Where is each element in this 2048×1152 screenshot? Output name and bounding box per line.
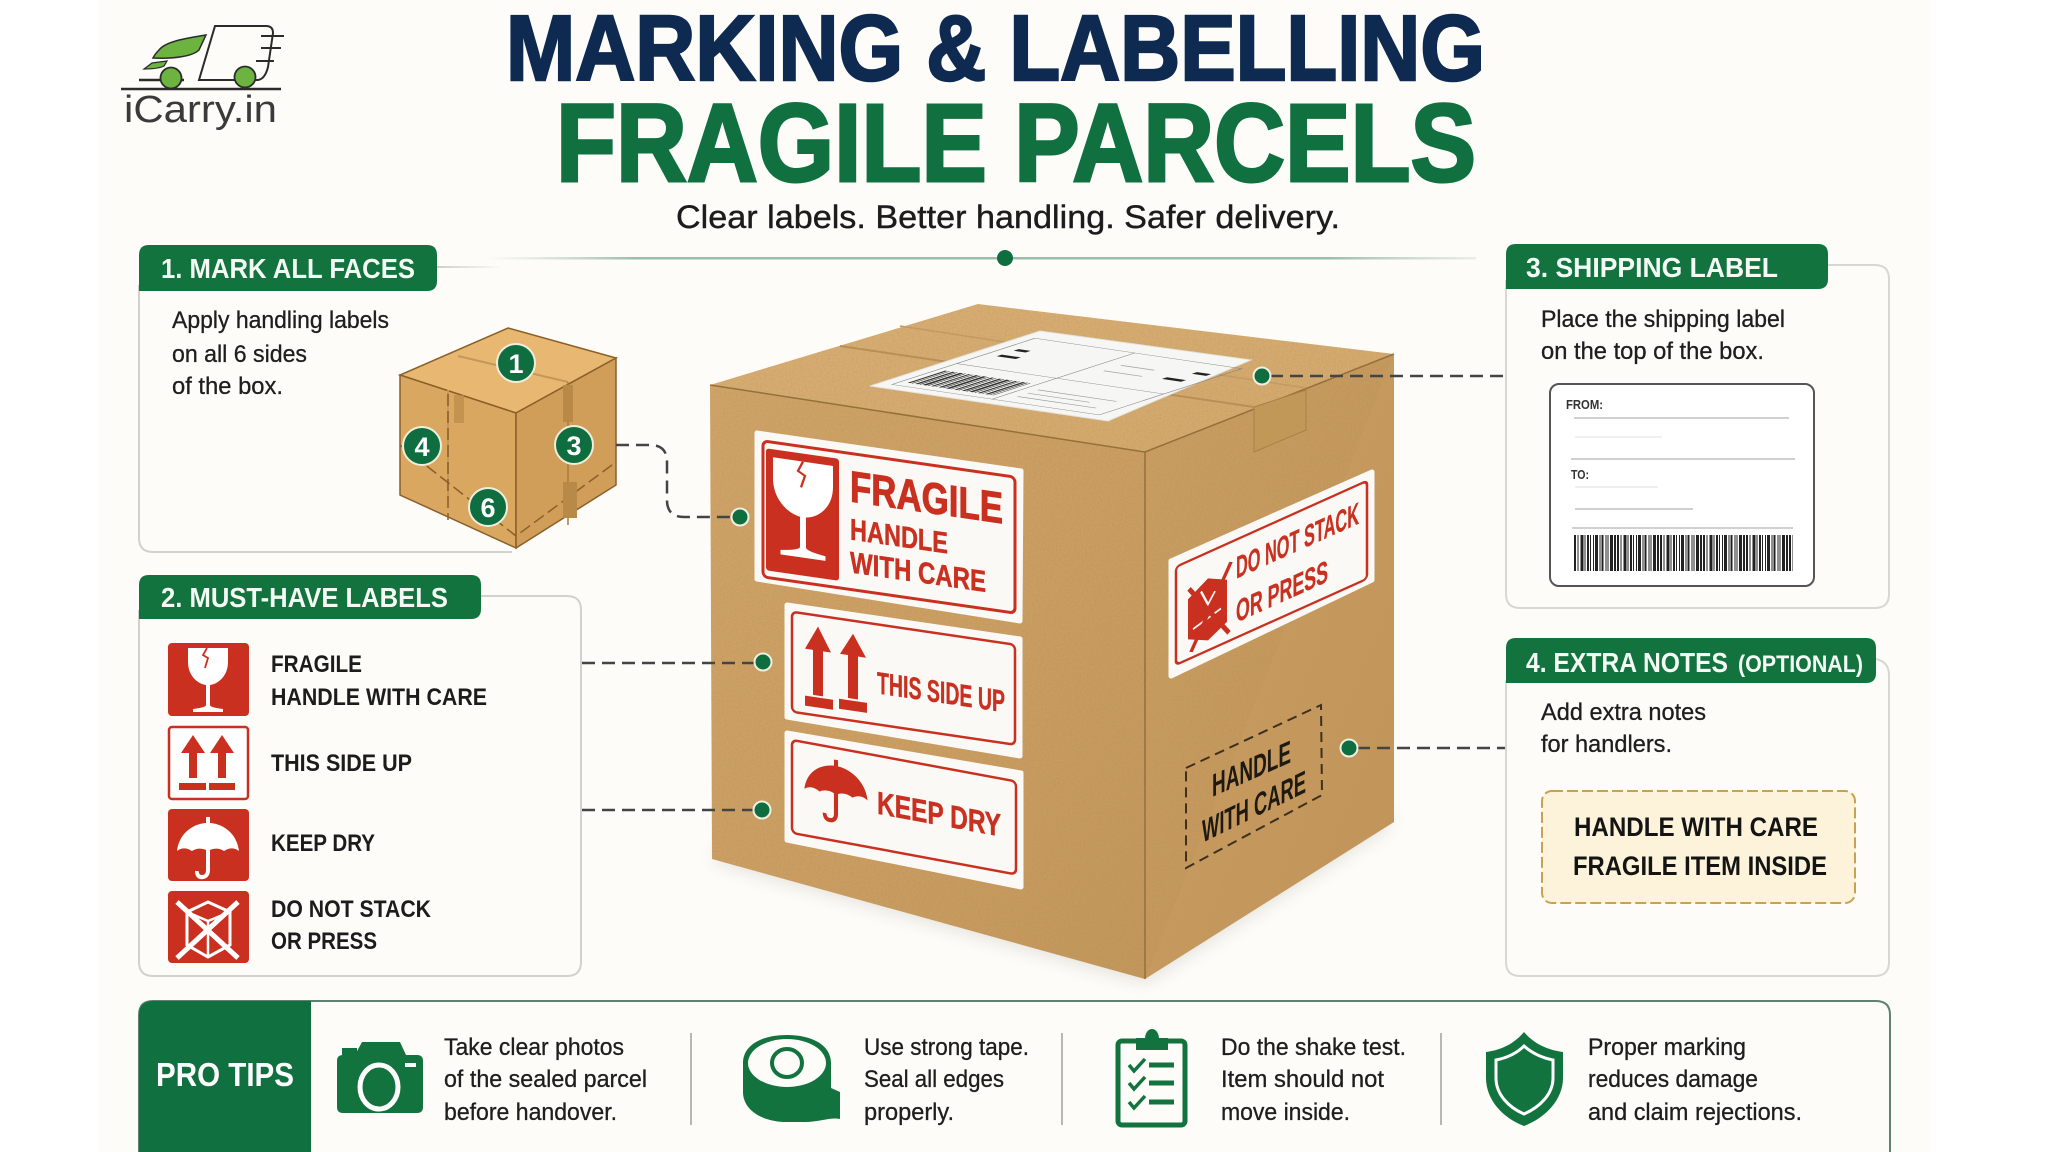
text: place the label: on the top of the box. [1541, 338, 1764, 365]
connector: shipping label [1254, 368, 1505, 384]
tip: photos: Take clear photos [444, 1034, 624, 1061]
illustration: main cardboard box [710, 304, 1394, 982]
stamp: handle with care: HANDLE [1212, 735, 1291, 805]
connector: extra notes [1340, 740, 1505, 756]
stamp: handle with care: WITH CARE [1202, 764, 1306, 851]
text: add extra notes [1541, 699, 1706, 758]
tip: shake test: Do the shake test. [1221, 1034, 1406, 1061]
heading: must-have labels: 2. MUST-HAVE LABELS [161, 582, 448, 613]
tip: photos: of the sealed parcel [444, 1066, 647, 1093]
heading: extra notes: (OPTIONAL) [1738, 651, 1863, 678]
badge 1 [497, 344, 535, 382]
logo: iCarry.in [121, 26, 284, 131]
tip: tape: Use strong tape. [864, 1034, 1029, 1061]
label: keep dry [787, 733, 1021, 887]
title: FRAGILE PARCELS [556, 82, 1476, 205]
badge 1: 1 [508, 349, 524, 379]
text: keep dry: KEEP DRY [271, 830, 375, 857]
note box: FRAGILE ITEM INSIDE [1573, 851, 1827, 881]
text: apply labels: on all 6 sides [172, 341, 307, 368]
text: add extra notes: for handlers. [1541, 731, 1672, 758]
stamp: handle with care [1186, 705, 1322, 868]
tip: tape: properly. [864, 1099, 954, 1126]
label: this side up [787, 605, 1020, 756]
tip: photos: before handover. [444, 1099, 617, 1126]
shipping label on top of box [870, 331, 1251, 421]
tip: shake test [1221, 1034, 1406, 1126]
shipping label card [1550, 384, 1814, 586]
icon: tape roll [743, 1035, 840, 1122]
shipping label card: TO: [1571, 468, 1589, 482]
connector: panel 2 to this side up label [582, 654, 772, 670]
text: place the label [1541, 306, 1785, 365]
text: add extra notes: Add extra notes [1541, 699, 1706, 726]
tape [1254, 390, 1306, 452]
label: fragile handle with care: HANDLE [850, 514, 948, 560]
heading: mark all faces: 1. MARK ALL FACES [161, 253, 415, 284]
label: keep dry: KEEP DRY [877, 785, 1001, 844]
text: do not stack or press [271, 896, 432, 955]
label: fragile handle with care: FRAGILE [850, 463, 1003, 533]
panel: 3 shipping label [1506, 244, 1889, 608]
panel: pro tips [139, 1001, 1890, 1152]
text: fragile handle with care [271, 651, 487, 711]
tip: tape: Seal all edges [864, 1066, 1004, 1093]
text: do not stack or press: DO NOT STACK [271, 896, 432, 923]
label: do not stack: OR PRESS [1236, 554, 1328, 629]
heading: mark all faces [139, 245, 437, 291]
badge 3: 3 [566, 431, 582, 461]
badge 4: 4 [414, 432, 430, 462]
panel: 1 mark all faces [139, 245, 616, 552]
icon: shield [1486, 1032, 1563, 1126]
panel: 2 must-have labels [139, 575, 581, 976]
label: fragile handle with care [757, 433, 1021, 621]
illustration: mini box with numbered faces [400, 328, 616, 548]
title [506, 0, 1485, 205]
panel: 4 extra notes [1506, 638, 1889, 976]
text: fragile handle with care: FRAGILE [271, 651, 362, 678]
heading: pro tips [139, 1001, 311, 1152]
text: apply labels: Apply handling labels [172, 307, 389, 334]
heading: extra notes [1506, 638, 1876, 683]
badge 6: 6 [480, 493, 496, 523]
note box [1542, 791, 1855, 903]
heading: shipping label: 3. SHIPPING LABEL [1526, 252, 1778, 283]
label: do not stack: DO NOT STACK [1236, 496, 1359, 585]
text: apply labels: of the box. [172, 373, 283, 400]
text: this side up: THIS SIDE UP [271, 750, 412, 777]
icon: do not stack [168, 891, 249, 963]
badge 6 [469, 488, 507, 526]
label: do not stack [1171, 472, 1372, 676]
connector: panel 2 to keep dry label [582, 802, 770, 818]
label: this side up: THIS SIDE UP [877, 665, 1005, 719]
icon: keep dry umbrella [168, 809, 249, 881]
badge 4 [403, 427, 441, 465]
icon: clipboard [1118, 1029, 1185, 1125]
tip: proper marking [1588, 1034, 1802, 1126]
tip: proper marking: and claim rejections. [1588, 1099, 1802, 1126]
text: do not stack or press: OR PRESS [271, 928, 377, 955]
heading: shipping label [1506, 244, 1828, 289]
shipping label card: FROM: [1566, 398, 1603, 412]
subtitle: Clear labels. Better handling. Safer delivery. [676, 199, 1340, 235]
badge 3 [555, 426, 593, 464]
text: apply labels [172, 307, 389, 400]
heading: extra notes: 4. EXTRA NOTES [1526, 647, 1728, 678]
tip: proper marking: reduces damage [1588, 1066, 1758, 1093]
box shadow [716, 815, 1390, 982]
icon: camera [337, 1042, 423, 1113]
barcode [1574, 535, 1793, 571]
text: fragile handle with care: HANDLE WITH CARE [271, 684, 487, 711]
label: fragile handle with care: WITH CARE [850, 547, 986, 599]
note box: HANDLE WITH CARE [1574, 812, 1818, 842]
heading: pro tips: PRO TIPS [156, 1056, 294, 1093]
icon: fragile glass [168, 643, 249, 716]
tip: photos [444, 1034, 647, 1126]
logo: iCarry.in: iCarry.in [124, 89, 277, 131]
tip: proper marking: Proper marking [1588, 1034, 1746, 1061]
icon: this side up arrows [169, 727, 248, 799]
text: place the label: Place the shipping label [1541, 306, 1785, 333]
connector: panel 1 to fragile label [616, 445, 748, 526]
heading: must-have labels [139, 575, 481, 619]
tip: shake test: Item should not [1221, 1066, 1384, 1093]
box faces [710, 304, 1394, 979]
tip: shake test: move inside. [1221, 1099, 1350, 1126]
title rule with dot [486, 250, 1476, 266]
tip: tape [864, 1034, 1029, 1126]
